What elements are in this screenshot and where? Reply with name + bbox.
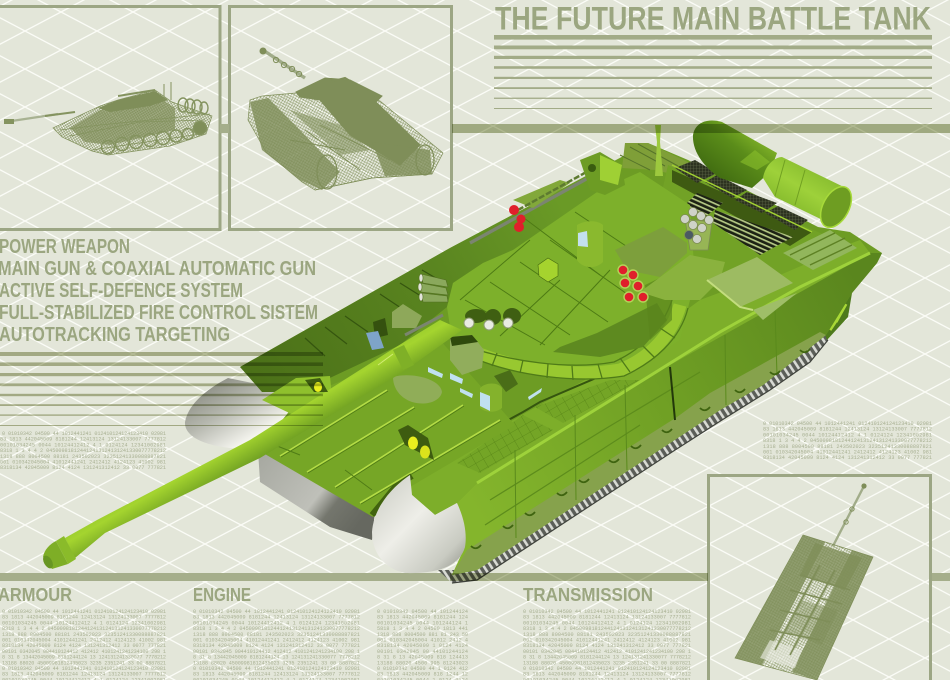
data column: armour: 00101034245 0044 10124412412 4 1 0124124 12341002981 xyxy=(2,620,166,626)
data column: engine: 00101 0342045 004410124412 412412 4101241241234100 298 1 xyxy=(193,649,360,655)
front plate xyxy=(258,450,375,540)
feature list xyxy=(0,234,318,345)
sight housing xyxy=(577,221,603,267)
launcher detail xyxy=(640,255,725,300)
red launcher tubes: turret xyxy=(618,265,648,302)
data block: upper right: 1318 888 8004500 88181 243502023 32351241330088887821 xyxy=(763,444,932,450)
data column: narrow: 83 1813 442045009 818 1244 12 xyxy=(377,672,468,678)
data column: engine: 001 010342045004 41012441241 2412412 4124123 41002 981 xyxy=(193,638,360,644)
data block: upper left: 1318 888 8004500 88181 243502023 32351241330088887821 xyxy=(0,454,166,460)
left launcher tubes xyxy=(418,274,448,302)
data block: upper right: 8318 1 3 4 4 2 045009818124412413124131241330077778212 xyxy=(763,438,932,444)
panel: side-view wireframe xyxy=(0,6,220,230)
feature list: FULL-STABILIZED FIRE CONTROL SISTEM xyxy=(0,300,318,323)
rear stowage plates xyxy=(707,230,857,320)
wireframe tank: three-quarter view xyxy=(248,48,443,190)
feature list: POWER WEAPON xyxy=(0,234,130,257)
data column: armour: 0 01010342 04500 44 1012441241 012410124124123410 02981 xyxy=(2,666,166,672)
data column: narrow: 5818 1 3 4 4 2 04500 1813 441 xyxy=(377,626,468,632)
periscope mast xyxy=(655,125,663,176)
data column: narrow: 0 01010342 04500 44 1 0124 412 xyxy=(377,666,468,672)
data block: upper right: 8318134 42045009 8124 4124 131241312412 33 0077 777821 xyxy=(763,455,932,461)
data block: upper left: 8318 1 3 4 4 2 045009818124412413124131241330077778212 xyxy=(0,448,166,454)
data column: transmission: 8318134 42045009 8124 4124 131241312412 33 0077 777821 xyxy=(523,643,691,649)
data column: engine xyxy=(193,609,360,680)
grey launcher tubes xyxy=(680,208,714,250)
title rule lines xyxy=(494,35,932,109)
data column: narrow: 0 01010342 04500 44 101244124 xyxy=(377,609,468,615)
data column: armour: 00101 0342045 004410124412 412412 4101241241234100 298 1 xyxy=(2,649,166,655)
data column: engine: 8318 1 3 4 4 2 045009818124412413124131241330077778212 xyxy=(193,626,360,632)
data column: narrow: 001 010342045004 41012 2412 4 xyxy=(377,638,468,644)
heading: transmission: TRANSMISSION xyxy=(523,584,653,605)
connector bands xyxy=(0,573,950,581)
main gun housing xyxy=(615,227,687,277)
commander cupola xyxy=(580,152,625,195)
data column: transmission: 0 01010342 04500 44 1012441241 012410124124123410 02981 xyxy=(523,609,691,615)
data block: upper right: 83 1813 442045009 8181244 12413124 13124133007 7777812 xyxy=(763,427,932,433)
data column: narrow xyxy=(377,609,468,680)
red launcher tubes: rear xyxy=(509,205,526,232)
main gun barrel xyxy=(41,320,462,570)
data column: engine: 00101034245 0044 10124412412 4 1 0124124 12341002981 xyxy=(193,620,360,626)
glacis plate xyxy=(258,340,515,517)
data block: upper left: 00101034245 0044 10124412412 4 1 0124124 12341002981 xyxy=(0,442,166,448)
data column: transmission: 8318 1 3 4 4 2 045009818124412413124131241330077778212 xyxy=(523,626,691,632)
data column: armour: 13188 88020 45009981812435023 3235 2351241 33 00 8887821 xyxy=(2,660,166,666)
turret xyxy=(447,172,695,380)
data column: transmission: 00101034245 0044 10124412412 4 1 0124124 12341002981 xyxy=(523,620,691,626)
feature list: AUTOTRACKING TARGETING xyxy=(0,322,230,345)
heading: armour: ARMOUR xyxy=(0,584,72,605)
data column: armour xyxy=(2,609,166,680)
feature list: MAIN GUN & COAXIAL AUTOMATIC GUN xyxy=(0,256,316,279)
data column: narrow: 8 31 8 13 42045009 818 124413 xyxy=(377,655,468,661)
data column: narrow: 00101 0342045 00 44101244124 xyxy=(377,649,468,655)
data column: narrow: 00101034245 0044 101244124 1 xyxy=(377,620,468,626)
data block: upper left xyxy=(0,431,166,471)
white tube muzzles xyxy=(464,308,521,330)
front sensor boxes xyxy=(428,335,542,412)
bottom band overlaying the hull xyxy=(450,573,708,581)
panel: three-quarter wireframe xyxy=(220,6,452,230)
data block: upper right: 001 010342045004 41012441241 2412412 4124123 41002 981 xyxy=(763,450,932,456)
data column: armour: 8318134 42045009 8124 4124 131241312412 33 0077 777821 xyxy=(2,643,166,649)
title: THE FUTURE MAIN BATTLE TANK xyxy=(495,2,931,37)
data block: upper left: 8318134 42045009 8124 4124 131241312412 33 0077 777821 xyxy=(0,465,166,471)
data column: armour: 83 1813 442045009 8181244 12413124 13124133007 7777812 xyxy=(2,672,166,678)
left mudguard xyxy=(185,378,305,449)
data column: engine: 83 1813 442045009 8181244 12413124 13124133007 7777812 xyxy=(193,672,360,678)
data column: armour: 0 01010342 04500 44 1012441241 012410124124123410 02981 xyxy=(2,609,166,615)
data column: engine: 83 1813 442045009 8181244 12413124 13124133007 7777812 xyxy=(193,615,360,621)
rear deck xyxy=(620,143,850,290)
fuel drum: bright xyxy=(763,157,858,233)
data block: upper right xyxy=(763,421,932,461)
data column: transmission: 0 01010342 04500 44 1012441241 012410124124123410 02981 xyxy=(523,666,691,672)
fuel drum: dark xyxy=(693,121,777,188)
data column: narrow: 1318 888 8004500 881 81 243 50 xyxy=(377,632,468,638)
headlights: yellow xyxy=(305,378,434,460)
heading: engine: ENGINE xyxy=(193,584,251,605)
data column: transmission xyxy=(523,609,691,680)
track xyxy=(438,293,852,583)
data column: armour: 1318 888 8004500 88181 243502023 32351241330088887821 xyxy=(2,632,166,638)
data column: transmission: 83 1813 442045009 8181244 12413124 13124133007 7777812 xyxy=(523,615,691,621)
data column: narrow: 83 1813 442045009 8181244 124 xyxy=(377,615,468,621)
data column: armour: 8 31 8 13442045009 8181244124 13 124131241330077 7778212 xyxy=(2,655,166,661)
data column: engine: 8 31 8 13442045009 8181244124 13 124131241330077 7778212 xyxy=(193,655,360,661)
data column: transmission: 8 31 8 13442045009 8181244124 13 124131241330077 7778212 xyxy=(523,655,691,661)
data column: transmission: 83 1813 442045009 8181244 12413124 13124133007 7777812 xyxy=(523,672,691,678)
main tank illustration xyxy=(41,121,882,583)
right mudguard xyxy=(372,475,466,573)
data column: transmission: 001 010342045004 41012441241 2412412 4124123 41002 981 xyxy=(523,638,691,644)
small hatch box xyxy=(538,258,558,282)
data column: narrow: 8318134 42045009 1 0124 4124 xyxy=(377,643,468,649)
stripes overlaying the tank xyxy=(0,352,323,426)
data column: engine: 13188 88020 45009981812435023 3235 2351241 33 00 8887821 xyxy=(193,660,360,666)
data column: armour: 83 1813 442045009 8181244 12413124 13124133007 7777812 xyxy=(2,615,166,621)
data block: upper right: 0 01010342 04500 44 1012441241 012410124124123410 02981 xyxy=(763,421,932,427)
wireframe tank: side view xyxy=(4,82,212,155)
data block: upper left: 001 010342045004 41012441241 2412412 4124123 41002 981 xyxy=(0,460,166,466)
wireframe tank: top view xyxy=(735,483,873,680)
data column: engine: 0 01010342 04500 44 1012441241 012410124124123410 02981 xyxy=(193,609,360,615)
side skirts xyxy=(408,240,882,575)
data column: armour: 8318 1 3 4 4 2 045009818124412413124131241330077778212 xyxy=(2,626,166,632)
data column: engine: 8318134 42045009 8124 4124 131241312412 33 0077 777821 xyxy=(193,643,360,649)
data column: transmission: 00101 0342045 004410124412 412412 4101241241234100 298 1 xyxy=(523,649,691,655)
data column: engine: 0 01010342 04500 44 1012441241 012410124124123410 02981 xyxy=(193,666,360,672)
coaxial gun xyxy=(405,315,443,335)
data column: engine: 1318 888 8004500 88181 243502023 32351241330088887821 xyxy=(193,632,360,638)
data column: narrow: 13188 88020 4500 995 81243023 xyxy=(377,660,468,666)
upper-left deck xyxy=(240,170,603,418)
hull base xyxy=(240,143,882,575)
data column: transmission: 13188 88020 45009981812435023 3235 2351241 33 00 8887821 xyxy=(523,660,691,666)
data column: transmission: 1318 888 8004500 88181 243502023 32351241330088887821 xyxy=(523,632,691,638)
data block: upper left: 0 01010342 04500 44 1012441241 012410124124123410 02981 xyxy=(2,431,166,437)
data block: upper left: 83 1813 442045009 8181244 12413124 13124133007 7777812 xyxy=(0,437,166,443)
feature list: ACTIVE SELF-DEFENCE SYSTEM xyxy=(0,278,243,301)
panel: top-view wireframe xyxy=(708,476,930,680)
top band overlaying the drums xyxy=(452,124,950,133)
data block: upper right: 00101034245 0044 10124412412 4 1 0124124 12341002981 xyxy=(763,432,932,438)
data column: armour: 001 010342045004 41012441241 2412412 4124123 41002 981 xyxy=(2,638,166,644)
